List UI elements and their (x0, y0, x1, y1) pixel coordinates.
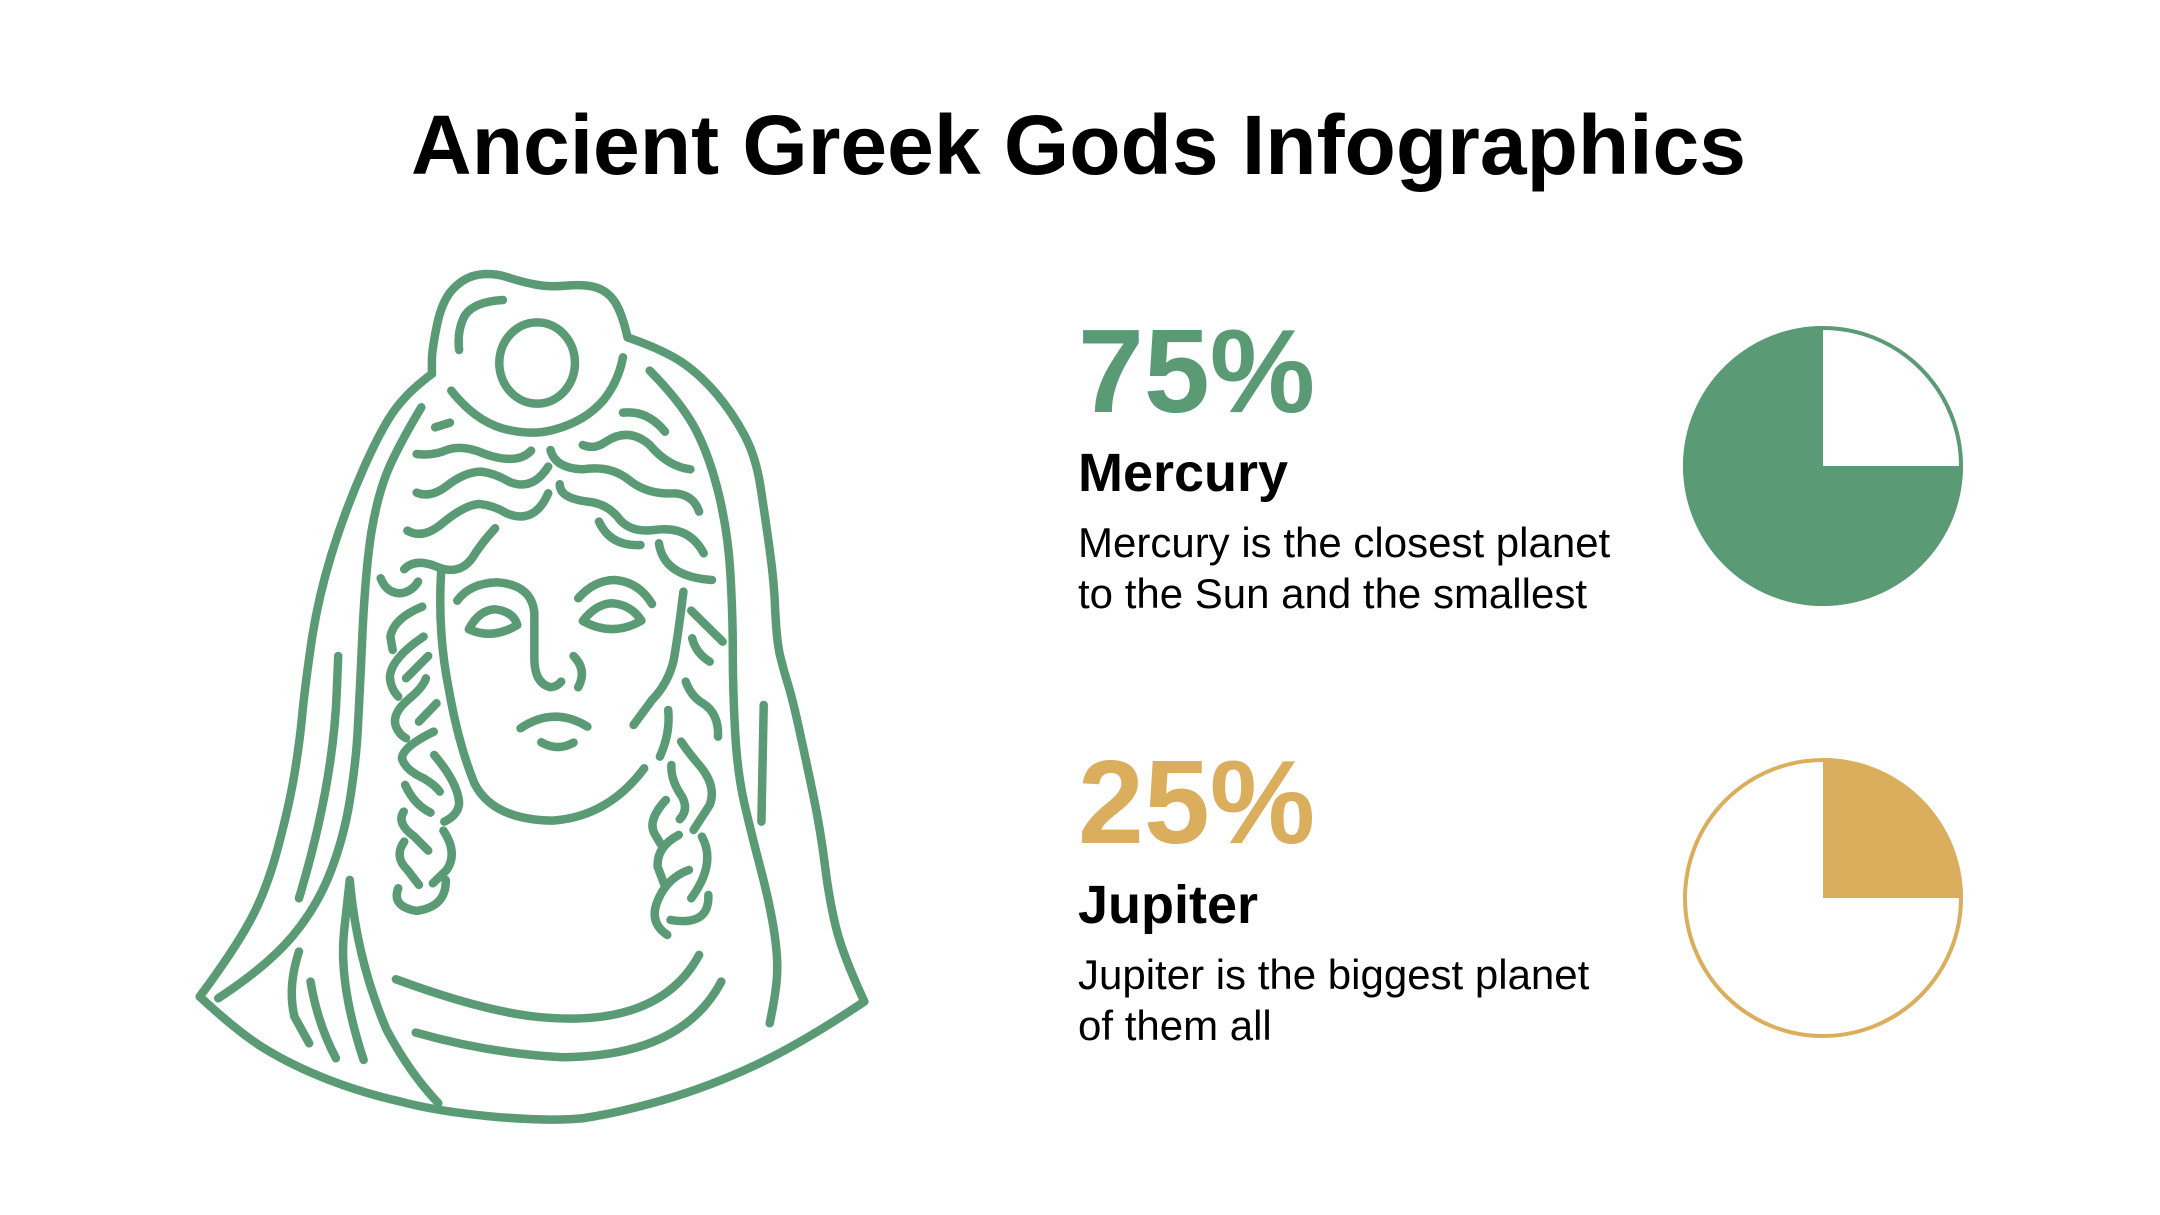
stat: 25%: 25% (1078, 737, 1315, 869)
pie chart: 75% (1683, 326, 1963, 606)
stat: 75%: 75% (1078, 306, 1315, 438)
right braid (652, 611, 723, 935)
veil and headdress outline (200, 274, 864, 1120)
text: Jupiter description: Jupiter is the biggest planet (1078, 951, 1589, 998)
text: Jupiter description: of them all (1078, 1002, 1272, 1049)
left braid (381, 578, 459, 911)
text: Mercury description: to the Sun and the smallest (1078, 570, 1587, 617)
heading: Jupiter: Jupiter (1078, 875, 1258, 935)
heading: Mercury: Mercury (1078, 443, 1288, 503)
crown ornament (435, 300, 623, 433)
wavy hair (404, 412, 712, 580)
pie chart: 25% (1683, 758, 1963, 1038)
title: Ancient Greek Gods Infographics (411, 98, 1746, 192)
face (440, 572, 683, 821)
drapery and chest folds (292, 880, 721, 1103)
text: Mercury description: Mercury is the closest planet (1078, 519, 1610, 566)
text: Mercury description (1078, 519, 1610, 617)
text: Jupiter description (1078, 951, 1589, 1049)
